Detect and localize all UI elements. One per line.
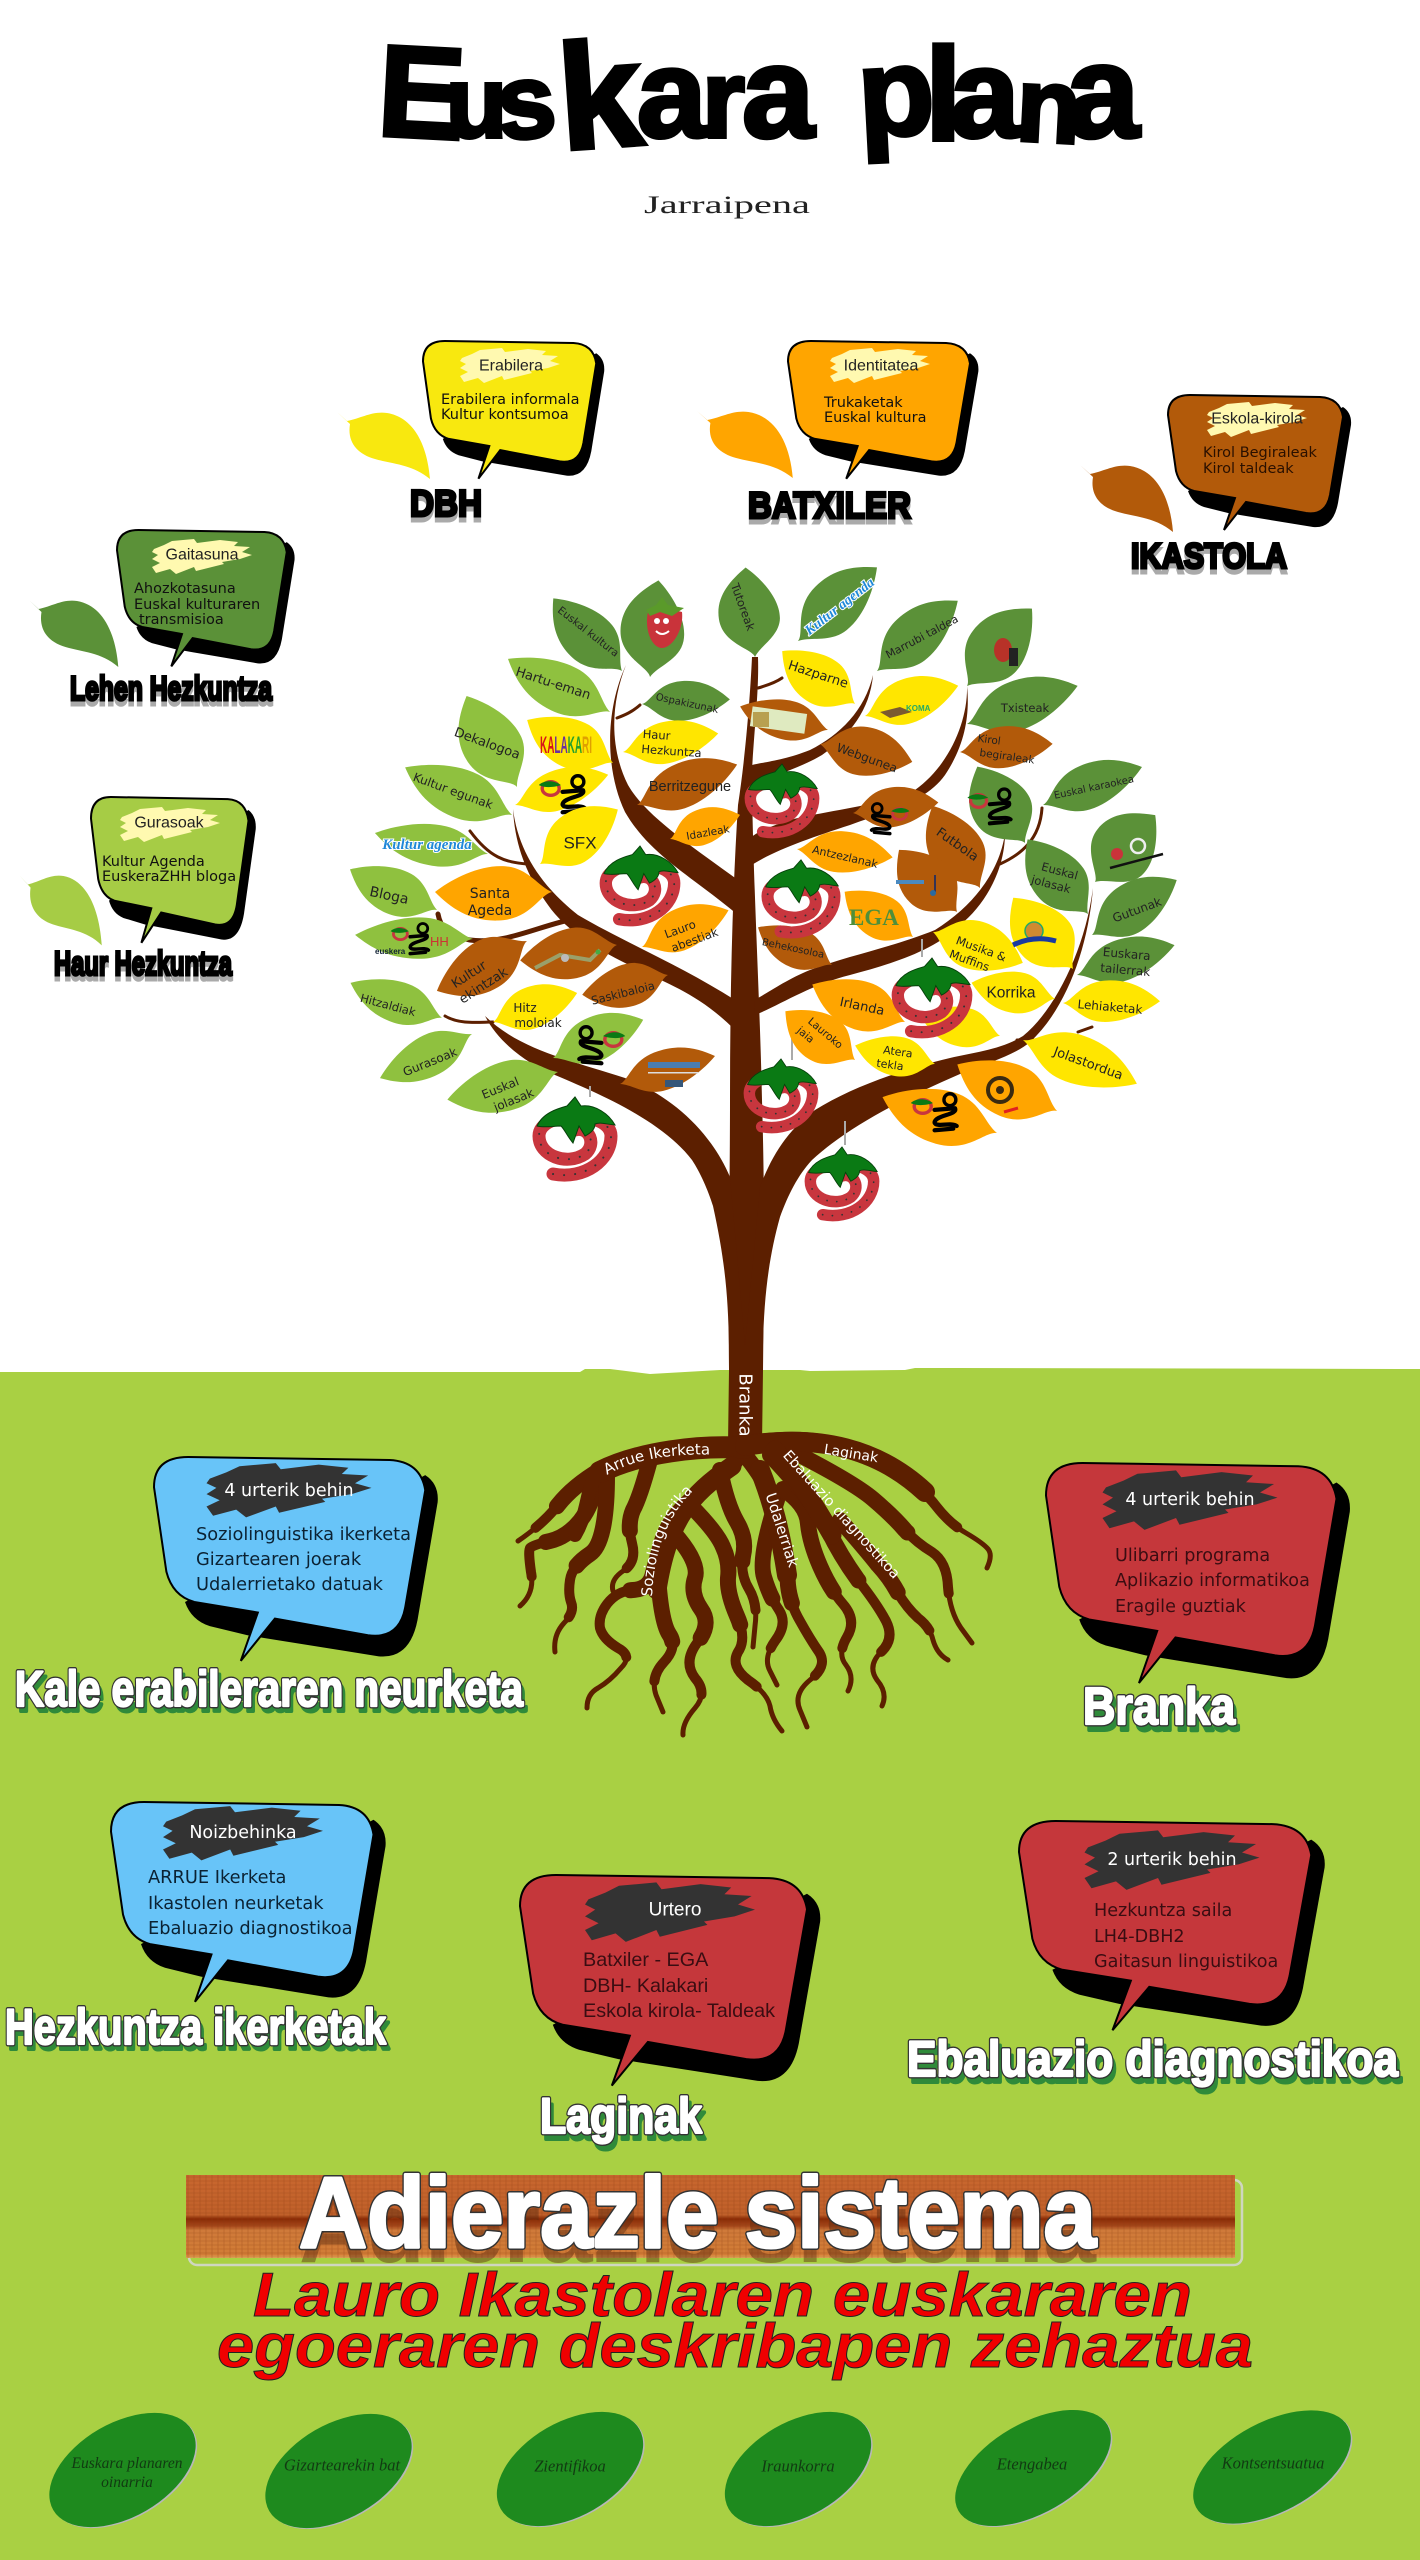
title: u bbox=[446, 47, 507, 159]
leaf: Euskara tailerrak bbox=[1071, 924, 1180, 994]
text: Gaitasuna list: Euskal kulturaren bbox=[134, 597, 260, 613]
speech bubble: Gaitasuna bbox=[117, 530, 295, 666]
badge: Noizbehinka: Noizbehinka bbox=[189, 1823, 297, 1843]
leaf: Kalakari bbox=[516, 699, 623, 786]
leaf: Gutunak bbox=[1078, 858, 1189, 955]
title: l bbox=[925, 21, 962, 168]
heading: Adierazle sistema: Adierazle sistema bbox=[299, 2157, 1097, 2269]
panel: Erabilera / DBH bbox=[337, 341, 604, 529]
text: red list Laginak: Eskola kirola- Taldeak bbox=[583, 2000, 775, 2022]
leaf: Tutoreak bbox=[714, 564, 784, 660]
leaf: Kultur egunak bbox=[395, 746, 522, 839]
leaf: snail icon bbox=[1070, 793, 1178, 902]
oval: Zientifikoa bbox=[477, 2388, 664, 2551]
leaf: Webgunea: Webgunea bbox=[835, 741, 899, 775]
leaf: Marrubi taldea: Marrubi taldea bbox=[884, 612, 960, 662]
leaf: Lehiaketak bbox=[1063, 980, 1160, 1023]
wooden board: Adierazle sistema: Adierazle sistema bbox=[299, 2172, 1097, 2284]
badge: Erabilera: Erabilera bbox=[479, 358, 543, 374]
leaf: EGA bbox=[832, 874, 925, 956]
strawberry 6 bbox=[748, 1059, 816, 1128]
leaf: Jolastordua bbox=[1015, 1016, 1146, 1106]
badge: Gaitasuna bbox=[152, 539, 252, 574]
leaf: Euskal jolasak right: Euskal bbox=[1040, 859, 1080, 883]
badge: 4 urterik behin: 4 urterik behin bbox=[1125, 1490, 1255, 1510]
leaf: Euskal jolasak left: Euskal bbox=[480, 1074, 521, 1102]
root label: Soziolinguistika: Soziolinguistika bbox=[641, 1488, 692, 1596]
leaf: Futbola: Futbola bbox=[933, 825, 981, 865]
leaf: Hitz moloiak: moloiak bbox=[514, 1016, 562, 1030]
root label: Arrue Ikerketa: Arrue Ikerketa bbox=[606, 1444, 709, 1475]
text: blue list 1: Soziolinguistika ikerketa bbox=[196, 1524, 411, 1545]
leaf: Euskera HH bbox=[354, 915, 474, 961]
leaf: Kirol begiraleak: begiraleak bbox=[979, 747, 1036, 767]
oval: Euskara planaren oinarria: Euskara planaren bbox=[71, 2454, 183, 2472]
leaf: Koma icon bbox=[858, 664, 965, 736]
leaf: Lauroko jaia bbox=[771, 992, 868, 1081]
leaf icon: dark green bbox=[29, 600, 118, 667]
leaf: Ospakizunak bbox=[641, 679, 731, 723]
leaf: Txisteak: Txisteak bbox=[1000, 701, 1049, 715]
leaf: ikastola logo bbox=[990, 880, 1094, 988]
leaf: Behekosoloa bbox=[749, 911, 841, 984]
heading: Lehen Hezkuntza bbox=[70, 670, 273, 713]
text: Gurasoak list: EuskeraZHH bloga bbox=[102, 869, 236, 885]
leaf: Lauroko jaia: Lauroko bbox=[805, 1016, 845, 1051]
badge: Identitatea: Identitatea bbox=[844, 358, 918, 374]
speech bubble: blue bbox=[111, 1802, 386, 2002]
strawberry 3 bbox=[749, 764, 817, 833]
leaf: Lauro abestiak bbox=[634, 890, 736, 965]
leaf: Haur Hezkuntza: Haur bbox=[642, 727, 671, 743]
speech bubble: Identitatea bbox=[788, 341, 978, 479]
leaf: Lehiaketak: Lehiaketak bbox=[1077, 997, 1143, 1017]
leaf: Kultur ekintzak: ekintzak bbox=[456, 964, 511, 1007]
leaf: EGA: EGA bbox=[849, 905, 899, 930]
leaf: Kultur agenda right: Kultur agenda bbox=[802, 575, 878, 639]
leaf: photo icon bbox=[735, 688, 833, 750]
root label: Laginak: Laginak bbox=[823, 1442, 880, 1466]
heading: Kale erabileraren neurketa: Kale erabileraren neurketa bbox=[18, 1666, 527, 1722]
leaf: Kalakari: KALAKARI bbox=[540, 732, 592, 759]
text: Erabilera list: Erabilera informala bbox=[441, 392, 579, 408]
leaf: Kultur ekintzak: Kultur bbox=[449, 958, 490, 991]
leaf: map icon bbox=[516, 921, 621, 986]
speech bubble: Erabilera bbox=[423, 341, 604, 479]
leaf: yellow behind strawberry bbox=[914, 996, 1005, 1056]
heading: Haur Hezkuntza: Haur Hezkuntza bbox=[54, 945, 233, 983]
oval: Gizartearekin bat bbox=[246, 2390, 433, 2553]
leaf: Irlanda: Irlanda bbox=[838, 995, 886, 1019]
badge: 2 urterik behin bbox=[1084, 1830, 1260, 1890]
leaf: Idazleak bbox=[664, 797, 745, 855]
title: E bbox=[375, 17, 469, 168]
leaf: Antzezlanak: Antzezlanak bbox=[811, 843, 880, 871]
text: Gaitasuna list: transmisioa bbox=[139, 612, 224, 628]
panel: Gurasoak / Haur Hezkuntza bbox=[19, 797, 256, 988]
text: blue list 2: Ebaluazio diagnostikoa bbox=[148, 1918, 353, 1939]
leaf: Antzezlanak bbox=[795, 827, 895, 877]
title: p bbox=[854, 21, 938, 164]
oval: Iraunkorra: Iraunkorra bbox=[760, 2456, 835, 2476]
leaf: Behekosoloa: Behekosoloa bbox=[761, 937, 825, 961]
leaf: Hartu-eman: Hartu-eman bbox=[514, 665, 592, 703]
title: n bbox=[1014, 46, 1084, 166]
title: r bbox=[702, 38, 745, 161]
leaf: Berritzegune bbox=[628, 743, 745, 825]
panel: Hezkuntza ikerketak bbox=[5, 1802, 389, 2060]
heading: DBH: DBH bbox=[410, 488, 482, 529]
leaf: Euskal jolasak right: jolasak bbox=[1029, 872, 1073, 896]
leaf: Hitz moloiak: Hitz bbox=[513, 1001, 537, 1015]
oval: Etengabea bbox=[936, 2386, 1131, 2551]
heading: Branka: Branka bbox=[1083, 1678, 1236, 1736]
heading: Hezkuntza ikerketak: Hezkuntza ikerketak bbox=[8, 2004, 389, 2060]
subtitle: Jarraipena bbox=[644, 192, 810, 219]
badge: Urtero bbox=[585, 1882, 755, 1942]
leaf: Hitzaldiak: Hitzaldiak bbox=[359, 991, 418, 1019]
leaf: Kirol begiraleak: Kirol bbox=[977, 733, 1001, 748]
leaf: Irlanda bbox=[803, 963, 914, 1046]
badge: Noizbehinka bbox=[163, 1806, 323, 1860]
strawberry 7 bbox=[809, 1147, 877, 1216]
white sky background bbox=[0, 0, 1420, 1380]
text: Gurasoak list: Kultur Agenda bbox=[102, 854, 205, 870]
text: Gaitasuna list: Ahozkotasuna bbox=[134, 581, 236, 597]
text: red list Ebaluazio: Gaitasun linguistikoa bbox=[1094, 1952, 1278, 1972]
speech bubble: blue bbox=[154, 1457, 438, 1661]
leaf: Musika & Muffins bbox=[925, 908, 1031, 985]
heading: IKASTOLA: IKASTOLA bbox=[1131, 542, 1287, 581]
heading: BATXILER: BATXILER bbox=[748, 490, 911, 531]
text: blue list 2: Ikastolen neurketak bbox=[148, 1893, 324, 1914]
oval: Iraunkorra bbox=[705, 2388, 892, 2551]
leaf: brown figure icon bbox=[850, 782, 941, 834]
text: Eskola-kirola list: Kirol taldeak bbox=[1203, 461, 1294, 477]
badge: Identitatea bbox=[830, 348, 930, 383]
leaf: Bloga bbox=[340, 850, 446, 932]
leaf: Euskara tailerrak: tailerrak bbox=[1100, 961, 1151, 979]
heading: Hezkuntza ikerketak: Hezkuntza ikerketak bbox=[5, 1999, 386, 2055]
panel: Laginak bbox=[520, 1875, 820, 2150]
text: red list Branka: Aplikazio informatikoa bbox=[1115, 1571, 1310, 1591]
text: red list Branka: Eragile guztiak bbox=[1115, 1597, 1247, 1617]
text: Identitatea list: Trukaketak bbox=[823, 395, 903, 411]
leaf: Santa Ageda bbox=[435, 866, 552, 921]
title: k bbox=[553, 8, 648, 182]
leaf: Jolastordua: Jolastordua bbox=[1050, 1044, 1125, 1083]
heading: Haur Hezkuntza: Haur Hezkuntza bbox=[54, 950, 233, 988]
badge: Eskola-kirola bbox=[1207, 402, 1307, 437]
title: a bbox=[742, 19, 850, 165]
leaf: Musika & Muffins: Musika & bbox=[954, 933, 1008, 964]
leaf: Atera tekla: Atera bbox=[882, 1043, 914, 1060]
leaf: Marrubi taldea bbox=[860, 581, 973, 689]
leaf: Euskera HH: euskera bbox=[375, 947, 406, 956]
title: a bbox=[950, 25, 1021, 164]
leaf: Kultur agenda right bbox=[779, 547, 894, 660]
oval: Euskara planaren oinarria: oinarria bbox=[101, 2474, 153, 2490]
heading: Branka: Branka bbox=[1083, 1678, 1236, 1736]
leaf: Korrika: Korrika bbox=[986, 984, 1036, 1002]
leaf icon: yellow bbox=[337, 412, 430, 479]
leaf: Korrika bbox=[967, 963, 1059, 1020]
heading: Lehen Hezkuntza: Lehen Hezkuntza bbox=[70, 675, 273, 713]
badge: 4 urterik behin: 4 urterik behin bbox=[224, 1481, 354, 1501]
panel: Eskola-kirola / IKASTOLA bbox=[1080, 395, 1351, 581]
leaf: Hartu-eman bbox=[496, 638, 621, 735]
panel: Kale erabileraren neurketa bbox=[15, 1457, 527, 1722]
tree leaves bbox=[340, 547, 1189, 1160]
leaf: Kultur agenda left: Kultur agenda bbox=[381, 837, 472, 853]
text: red list Laginak: Batxiler - EGA bbox=[583, 1949, 709, 1971]
heading: Branka: Branka bbox=[1086, 1684, 1239, 1742]
badge: Gurasoak bbox=[120, 807, 220, 842]
badge: Gaitasuna: Gaitasuna bbox=[166, 546, 239, 564]
heading: Laginak: Laginak bbox=[540, 2088, 702, 2144]
leaf: SFX bbox=[525, 788, 632, 884]
panel: Branka bbox=[1046, 1463, 1350, 1742]
badge: 4 urterik behin bbox=[206, 1463, 372, 1517]
leaf: Euskal karaokea bbox=[1035, 745, 1150, 825]
oval: Etengabea: Etengabea bbox=[996, 2454, 1067, 2474]
leaf: Gurasoak bbox=[371, 1016, 481, 1098]
leaf: Kultur agenda left bbox=[371, 814, 492, 875]
leaf: Euskal kultura bbox=[534, 582, 640, 690]
leaf: Tutoreak: Tutoreak bbox=[728, 580, 758, 633]
leaf: Haur Hezkuntza bbox=[619, 712, 722, 771]
leaf: Euskal jolasak left: jolasak bbox=[491, 1086, 536, 1115]
leaf icon: light green bbox=[19, 875, 102, 945]
leaf: Kultur egunak: Kultur egunak bbox=[411, 770, 495, 812]
leaf icon: orange bbox=[697, 411, 793, 478]
oval: Euskara planaren oinarria bbox=[30, 2389, 217, 2552]
leaf: Hitz moloiak bbox=[486, 972, 584, 1041]
leaf: Euskal karaokea: Euskal karaokea bbox=[1053, 774, 1135, 802]
leaf: strawberry face bbox=[617, 577, 689, 680]
text: red list Branka: Ulibarri programa bbox=[1115, 1546, 1270, 1566]
panel: Ebaluazio diagnostikoa bbox=[907, 1821, 1402, 2093]
leaf: green figure icon bbox=[951, 752, 1049, 859]
leaf: Koma icon: KOMA bbox=[906, 704, 931, 713]
heading: Adierazle sistema: Adierazle sistema bbox=[299, 2157, 1097, 2269]
text: red list Laginak: DBH- Kalakari bbox=[583, 1975, 708, 1997]
panel: Identitatea / BATXILER bbox=[697, 341, 978, 531]
leaf: Musika & Muffins: Muffins bbox=[948, 947, 991, 974]
leaf: Hazparne bbox=[767, 632, 869, 725]
text: Erabilera list: Kultur kontsumoa bbox=[441, 407, 569, 423]
speech bubble: Eskola-kirola bbox=[1168, 395, 1351, 530]
leaf: Berritzegune: Berritzegune bbox=[649, 779, 731, 795]
speech bubble: Gurasoak bbox=[91, 797, 256, 943]
leaf: Txisteak bbox=[959, 662, 1085, 746]
leaf: poster icon bbox=[614, 1036, 720, 1102]
text: blue list 2: ARRUE Ikerketa bbox=[148, 1867, 286, 1888]
text: Identitatea list: Euskal kultura bbox=[824, 410, 926, 426]
leaf: red figure icon bbox=[943, 589, 1054, 704]
leaf: Kultur ekintzak bbox=[425, 920, 540, 1014]
leaf: Haur Hezkuntza: Hezkuntza bbox=[641, 742, 702, 760]
leaf: Futbola bbox=[908, 793, 1002, 902]
root label: Udalerriak: Udalerriak bbox=[762, 1490, 803, 1570]
leaf: music icon bbox=[879, 833, 976, 931]
heading: BATXILER: BATXILER bbox=[748, 485, 911, 526]
leaf: Lauro abestiak: Lauro bbox=[663, 917, 698, 941]
heading: Laginak: Laginak bbox=[543, 2094, 705, 2150]
leaf: Saskibaloia bbox=[578, 955, 673, 1017]
badge: 2 urterik behin: 2 urterik behin bbox=[1107, 1850, 1237, 1870]
leaf: Santa Ageda: Santa bbox=[470, 886, 510, 902]
heading: Kale erabileraren neurketa: Kale erabileraren neurketa bbox=[15, 1661, 524, 1717]
badge: 4 urterik behin bbox=[1102, 1470, 1278, 1530]
panel: Gaitasuna / Lehen Hezkuntza bbox=[29, 530, 295, 713]
subtitle: red description bbox=[217, 2261, 1253, 2381]
leaf: Ospakizunak: Ospakizunak bbox=[655, 692, 720, 716]
heading: Kale erabileraren neurketa: Kale erabileraren neurketa bbox=[15, 1661, 524, 1717]
badge: Urtero: Urtero bbox=[649, 1900, 701, 1920]
leaf: Atera tekla: tekla bbox=[876, 1056, 904, 1073]
tree roots bbox=[516, 1373, 993, 1738]
subtitle: red description: Lauro Ikastolaren euskararen bbox=[253, 2261, 1192, 2330]
oval: Gizartearekin bat: Gizartearekin bat bbox=[284, 2456, 401, 2474]
root label: Ebaluazio diagnostikoa: Ebaluazio diagnostikoa bbox=[779, 1448, 903, 1582]
badge: Erabilera bbox=[460, 348, 560, 383]
leaf: SFX: SFX bbox=[563, 834, 597, 852]
leaf: Idazleak: Idazleak bbox=[685, 823, 731, 843]
leaf: Euskara tailerrak: Euskara bbox=[1102, 945, 1151, 963]
leaf: Euskal kultura: Euskal kultura bbox=[555, 604, 621, 660]
text: red list Ebaluazio: LH4-DBH2 bbox=[1094, 1927, 1185, 1947]
heading: DBH: DBH bbox=[410, 483, 482, 524]
strawberry 1 bbox=[604, 846, 678, 920]
leaf: Gutunak: Gutunak bbox=[1111, 895, 1163, 925]
leaf: Lauro abestiak: abestiak bbox=[669, 925, 720, 955]
text: blue list 1: Gizartearen joerak bbox=[196, 1549, 362, 1570]
leaf: Euskera HH: HH bbox=[430, 934, 449, 949]
strawberry 5 bbox=[896, 958, 970, 1032]
title: a bbox=[1066, 18, 1141, 165]
ovals row bbox=[30, 2386, 1371, 2553]
leaf: Dekalogoa bbox=[439, 682, 542, 802]
speech bubble: red bbox=[520, 1875, 820, 2086]
leaf: Hazparne: Hazparne bbox=[786, 658, 850, 692]
title: a bbox=[637, 25, 708, 164]
text: Eskola-kirola list: Kirol Begiraleak bbox=[1203, 445, 1317, 461]
oval: Zientifikoa: Zientifikoa bbox=[534, 2456, 606, 2476]
root label: Branka: Branka bbox=[734, 1373, 756, 1437]
leaf icon: brown bbox=[1080, 465, 1173, 532]
oval: Kontsentsuatua: Kontsentsuatua bbox=[1221, 2454, 1324, 2472]
heading: Haur Hezkuntza bbox=[54, 945, 233, 988]
leaf: Euskal jolasak left bbox=[442, 1049, 564, 1125]
leaf: Bloga: Bloga bbox=[368, 884, 410, 908]
heading: Hezkuntza ikerketak: Hezkuntza ikerketak bbox=[5, 1999, 386, 2055]
badge: Eskola-kirola: Eskola-kirola bbox=[1211, 410, 1303, 428]
speech bubble: red bbox=[1046, 1463, 1350, 1683]
text: red list Ebaluazio: Hezkuntza saila bbox=[1094, 1901, 1232, 1921]
leaf: Gurasoak: Gurasoak bbox=[401, 1045, 459, 1079]
leaf: yellow figure icon bbox=[509, 755, 614, 823]
heading: IKASTOLA: IKASTOLA bbox=[1131, 537, 1287, 576]
oval: Kontsentsuatua bbox=[1175, 2387, 1371, 2548]
speech bubble: red bbox=[1019, 1821, 1325, 2030]
leaf: Lauroko jaia: jaia bbox=[794, 1024, 816, 1046]
leaf: Euskal jolasak right bbox=[1006, 823, 1108, 932]
leaf: Kirol begiraleak bbox=[958, 722, 1054, 772]
strawberries hanging on the tree bbox=[537, 764, 970, 1216]
subtitle: red description: egoeraren deskribapen zehaztua bbox=[217, 2312, 1253, 2381]
leaf: Dekalogoa: Dekalogoa bbox=[452, 725, 522, 763]
tree trunk and branches bbox=[438, 657, 1093, 1445]
badge: Gurasoak: Gurasoak bbox=[134, 814, 205, 832]
leaf: orange figure icon bbox=[874, 1072, 1005, 1160]
leaf: triskel icon bbox=[945, 1041, 1068, 1137]
leaf: Santa Ageda: Ageda bbox=[468, 903, 512, 919]
heading: Lehen Hezkuntza: Lehen Hezkuntza bbox=[70, 670, 273, 708]
green ground bbox=[0, 1368, 1420, 2560]
leaf: Webgunea bbox=[816, 719, 917, 785]
strawberry 2 bbox=[537, 1097, 615, 1175]
leaf: light green figure icon bbox=[544, 998, 651, 1077]
heading: Laginak: Laginak bbox=[540, 2088, 702, 2144]
leaf: Saskibaloia: Saskibaloia bbox=[590, 978, 656, 1008]
leaf: Hitzaldiak bbox=[343, 964, 449, 1038]
title: s bbox=[492, 41, 560, 163]
text: blue list 1: Udalerrietako datuak bbox=[196, 1574, 384, 1595]
strawberry 4 bbox=[766, 860, 838, 932]
leaf: Atera tekla bbox=[850, 1027, 939, 1084]
